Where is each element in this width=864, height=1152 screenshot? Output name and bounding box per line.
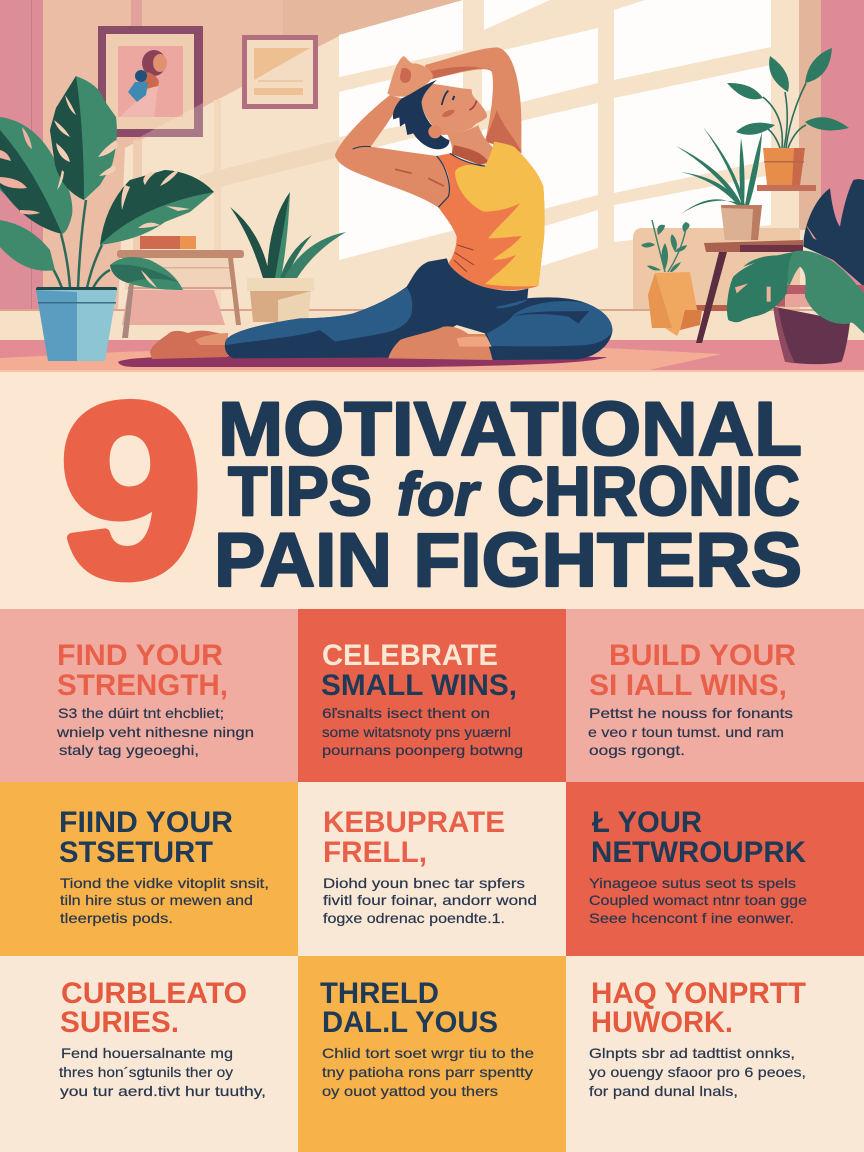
panel: tip 4: tiln hire stus or mewen and <box>60 892 253 908</box>
yoga mat <box>118 356 607 367</box>
panel: tip 6: Yinageoe sutus seot ts spels <box>589 875 796 891</box>
panel: tip 1: FIND YOUR <box>57 639 223 672</box>
panel: tip 1: S3 the dúirt tnt ehcbliet; <box>58 705 224 721</box>
panel: tip 8: tny patioha rons parr spentty <box>322 1064 533 1080</box>
panel: tip 1: wnielp veht nithesne ningn <box>56 724 254 740</box>
panel: tip 6 <box>566 782 864 956</box>
panel: tip 5: fivitl four foinar, andorr wond <box>323 892 537 908</box>
panel: tip 2: CELEBRATE <box>322 639 498 672</box>
panel: tip 1 <box>0 609 298 782</box>
title heading: MOTIVATIONAL <box>218 387 802 472</box>
panel: tip 8: THRELD <box>320 977 439 1010</box>
title heading: PAIN FIGHTERS <box>214 518 802 603</box>
center foot <box>388 326 493 360</box>
title heading: TIPS <box>228 452 372 530</box>
panel: tip 8 <box>298 956 566 1152</box>
panel: tip 8: Chlid tort soet wrgr tiu to the <box>322 1045 534 1061</box>
wooden table <box>668 240 803 343</box>
window panes <box>339 0 771 285</box>
plant: hanging shelf plant in orange pot <box>727 48 849 191</box>
panel: tip 9: HAQ YONPRTT <box>591 977 806 1010</box>
panel: tip 6: NETWROUPRK <box>591 836 806 869</box>
hair <box>393 80 449 149</box>
panel: tip 2 <box>298 609 566 782</box>
panel: tip 6: Ł YOUR <box>592 806 702 839</box>
tank top <box>437 142 545 290</box>
back arm <box>425 47 522 153</box>
ear <box>428 125 442 138</box>
panel: tip 9: Glnpts sbr ad tadttist onnks, <box>589 1045 795 1061</box>
panel: tip 7 <box>0 956 298 1152</box>
panel: tip 3: Pettst he nouss for fonants <box>589 705 793 721</box>
panel: tip 2: some witatsnoty pns yuærnl <box>322 724 511 740</box>
plant: snake plant in cream pot <box>230 192 346 322</box>
panel: tip 8: DAL.L YOUS <box>322 1006 498 1039</box>
panel: tip 9 <box>566 956 864 1152</box>
panel: tip 8: oy ouot yattod you thers <box>322 1083 498 1099</box>
title heading <box>214 387 802 603</box>
picture frame: abstract <box>242 35 318 109</box>
panel: tip 4: STSETURT <box>59 836 213 869</box>
panel: tip 5: KEBUPRATE <box>323 806 505 839</box>
face <box>422 83 487 135</box>
panel: tip 2: pournans poonperg botwng <box>322 742 523 758</box>
title banner <box>0 353 864 627</box>
panel: tip 7: you tur aerd.tivt hur tuuthy, <box>60 1083 266 1099</box>
panel: tip 3: BUILD YOUR <box>609 639 796 672</box>
panel: tip 4: Tiond the vidke vitoplit snsit, <box>60 875 269 891</box>
panel: tip 4 <box>0 782 298 956</box>
panel: tip 1: STRENGTH, <box>57 669 228 702</box>
panel: tip 5: Diohd youn bnec tar spfers <box>323 875 525 891</box>
plant: small sprig in orange pot <box>641 220 702 336</box>
title heading: for <box>397 461 482 528</box>
floor <box>0 309 864 372</box>
picture frame: mother and child <box>98 26 203 137</box>
panel: tip 7: SURIES. <box>60 1006 179 1039</box>
side table with box <box>117 236 244 338</box>
panel: tip 4: tleerpetis pods. <box>60 910 173 926</box>
panel: tip 7: thres hon´sgtunils ther oy <box>59 1064 233 1080</box>
panel: tip 3: SI IALL WINS, <box>589 669 787 702</box>
panel: tip 9: for pand dunal lnals, <box>589 1083 738 1099</box>
plant: spiky plant in tan pot <box>676 127 762 240</box>
panel: tip 3 <box>566 609 864 782</box>
illustration: yoga room scene <box>0 0 864 372</box>
left foot <box>150 331 228 359</box>
dark leaf, wine pot and monstera <box>727 179 864 364</box>
panel: tip 5: FRELL, <box>323 836 427 869</box>
panel: tip 3: e veo r toun tumst. und ram <box>588 724 784 740</box>
panel: tip 3: oogs rgongt. <box>589 742 685 758</box>
panel: tip 4: FIIND YOUR <box>59 806 233 839</box>
pants <box>225 258 612 360</box>
panel: tip 7: CURBLEATO <box>61 977 247 1010</box>
panel: tip 5: fogxe odrenac poendte.1. <box>323 910 505 926</box>
big number 9: 9 <box>60 353 202 627</box>
panel: tip 6: Seee hcencont f ine eonwer. <box>589 910 794 926</box>
panel: tip 9: HUWORK. <box>591 1006 733 1039</box>
hands <box>387 56 433 97</box>
plant: monstera in blue pot <box>0 76 214 361</box>
neck <box>447 125 497 165</box>
person in yoga pose <box>225 47 612 360</box>
wall and sunlight <box>0 0 864 372</box>
panel: tip 2: 6ľsnalts isect thent on <box>322 705 490 721</box>
title heading: CHRONIC <box>497 452 800 530</box>
sofa <box>633 228 800 310</box>
panel: tip 9: yo ouengy sfaoor pro 6 peoes, <box>589 1064 806 1080</box>
panel: tip 1: staly tag ygeoeghi, <box>59 742 199 758</box>
panel: tip 6: Coupled womact ntnr toan gge <box>589 892 807 908</box>
panel: tip 7: Fend houersalnante mg <box>61 1045 233 1061</box>
panel: tip 2: SMALL WINS, <box>321 669 517 702</box>
panel: tip 5 <box>298 782 566 956</box>
front arm <box>335 95 449 207</box>
